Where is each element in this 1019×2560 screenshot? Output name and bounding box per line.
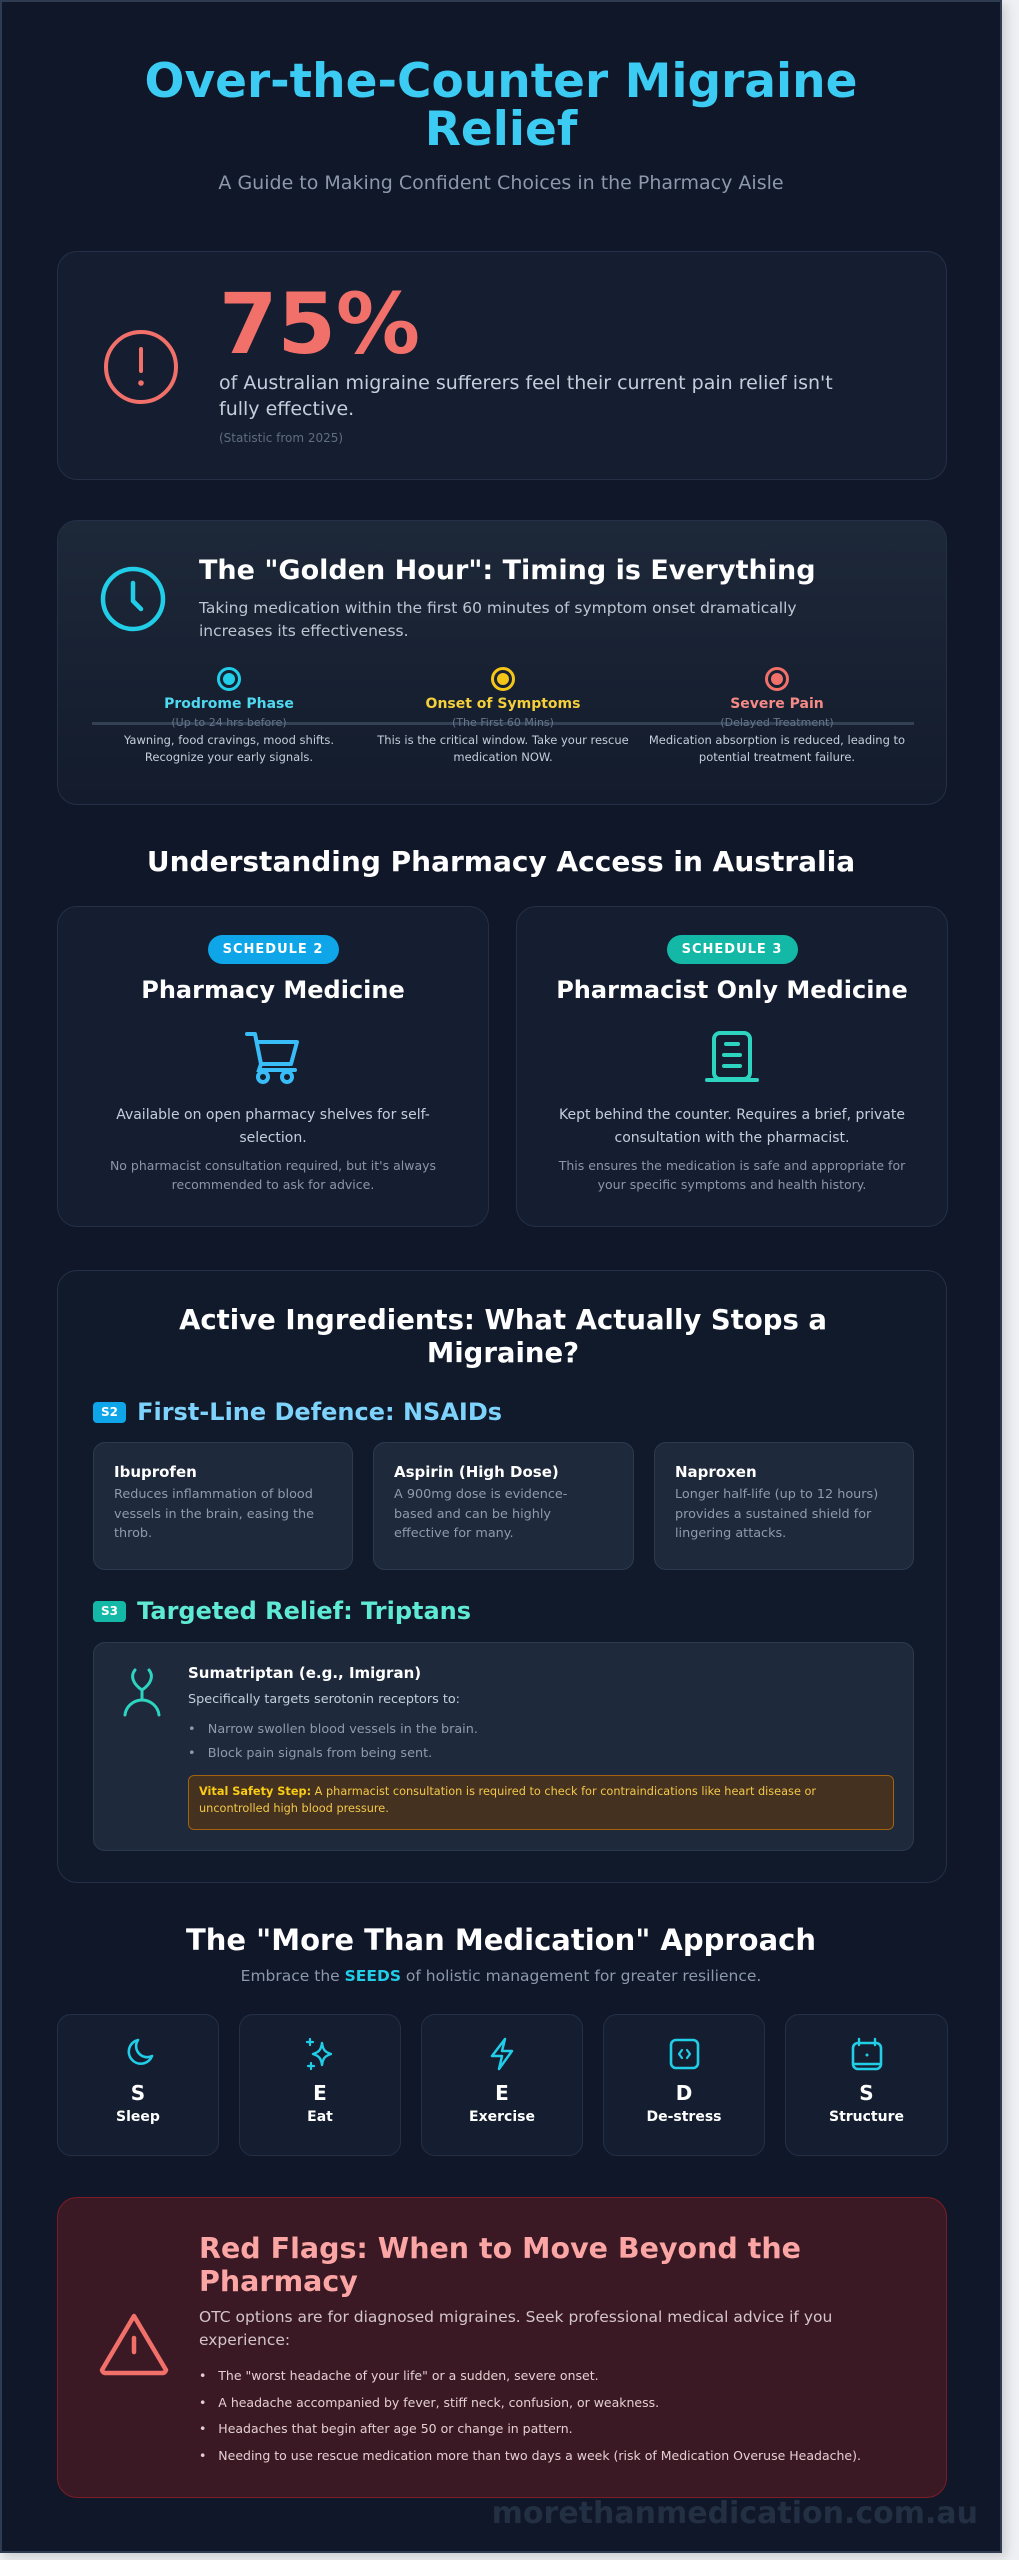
badge: SCHEDULE 3 xyxy=(682,942,782,957)
heading: more than medication: The "More Than Medication" Approach xyxy=(186,1923,816,1957)
heading: Red Flags: When to Move Beyond the xyxy=(199,2232,801,2265)
step: severe: Medication absorption is reduced, leading to xyxy=(649,733,905,747)
description: experience: xyxy=(199,2331,290,2349)
step: onset xyxy=(377,667,629,764)
description: OTC options are for diagnosed migraines. Seek professional medical advice if you xyxy=(199,2308,832,2326)
panel: schedule 2 xyxy=(57,906,489,1227)
bullet list: • A headache accompanied by fever, stiff neck, confusion, or weakness. xyxy=(199,2395,659,2410)
icon: cart xyxy=(245,1032,299,1084)
intro: Specifically targets serotonin receptors to: xyxy=(188,1692,460,1707)
description xyxy=(116,1107,430,1146)
title: Sumatriptan (e.g., Imigran) xyxy=(188,1664,421,1682)
description: Kept behind the counter. Requires a brief, private xyxy=(559,1107,905,1123)
bullet list: • Block pain signals from being sent. xyxy=(188,1746,432,1761)
panel: schedule 3 xyxy=(516,906,948,1227)
step: severe: Severe Pain xyxy=(730,696,824,712)
card: structure: S xyxy=(859,2081,874,2105)
step: severe xyxy=(649,667,905,764)
card title: Pharmacy Medicine xyxy=(141,976,405,1004)
card: naproxen: provides a sustained shield for xyxy=(675,1506,871,1522)
card: de-stress: De-stress xyxy=(646,2109,722,2125)
title: Relief xyxy=(425,102,577,157)
heading: Pharmacy xyxy=(199,2265,358,2298)
step: prodrome: Prodrome Phase xyxy=(164,696,294,712)
watermark: morethanmedication.com.au xyxy=(492,2496,978,2531)
step: prodrome xyxy=(124,667,334,764)
card title: Pharmacist Only Medicine xyxy=(556,976,908,1004)
card: sleep: S xyxy=(131,2081,145,2105)
bullet list: • Narrow swollen blood vessels in the brain. xyxy=(188,1722,478,1737)
card: aspirin: A 900mg dose is evidence- xyxy=(394,1487,567,1502)
description xyxy=(199,2308,832,2349)
step: onset: Onset of Symptoms xyxy=(426,696,580,712)
description: increases its effectiveness. xyxy=(199,622,409,640)
seeds cards xyxy=(57,2014,948,2156)
card: de-stress xyxy=(603,2014,765,2156)
step: severe: (Delayed Treatment) xyxy=(720,716,834,729)
note xyxy=(110,1158,436,1192)
description xyxy=(559,1107,905,1146)
panel: red flags xyxy=(57,2197,947,2498)
card: aspirin: Aspirin (High Dose) xyxy=(394,1463,559,1481)
note xyxy=(558,1158,906,1192)
card: naproxen: lingering attacks. xyxy=(675,1526,786,1541)
bullet list: • Needing to use rescue medication more than two days a week (risk of Medication Overuse Headache). xyxy=(199,2448,861,2463)
subheading: triptans: S3 xyxy=(101,1604,118,1618)
description: Available on open pharmacy shelves for self- xyxy=(116,1107,430,1123)
card: ibuprofen: vessels in the brain, easing the xyxy=(114,1506,314,1522)
heading: Active Ingredients: What Actually Stops a xyxy=(179,1304,827,1336)
icon: counter document xyxy=(705,1031,759,1082)
card: sleep: Sleep xyxy=(116,2109,160,2125)
card: aspirin xyxy=(373,1442,634,1570)
icon: receptor xyxy=(124,1668,160,1716)
card: sumatriptan xyxy=(93,1642,914,1851)
callout: safety: Vital Safety Step: A pharmacist consultation is required to check for contraindications like heart disease or uncontrolled high blood pressure. xyxy=(199,1785,816,1814)
heading xyxy=(179,1304,827,1369)
panel: active ingredients xyxy=(57,1270,947,1883)
card: structure xyxy=(785,2014,948,2156)
description xyxy=(198,599,797,640)
card: ibuprofen: throb. xyxy=(114,1526,152,1541)
note: recommended to ask for advice. xyxy=(172,1177,374,1192)
heading xyxy=(199,2232,801,2298)
note: your specific symptoms and health history. xyxy=(598,1177,866,1192)
subheading: NSAIDs: First-Line Defence: NSAIDs xyxy=(137,1398,502,1426)
description: Taking medication within the first 60 minutes of symptom onset dramatically xyxy=(199,599,797,617)
step: onset: This is the critical window. Take your rescue xyxy=(377,733,629,747)
bullet list: • The "worst headache of your life" or a sudden, severe onset. xyxy=(199,2368,599,2383)
icon: alert circle xyxy=(104,330,178,404)
description: consultation with the pharmacist. xyxy=(614,1130,850,1146)
note: This ensures the medication is safe and appropriate for xyxy=(559,1158,905,1173)
card: exercise: E xyxy=(495,2081,509,2105)
badge: SCHEDULE 2 xyxy=(223,942,323,957)
panel: golden hour xyxy=(57,520,947,805)
card: aspirin: effective for many. xyxy=(394,1526,514,1541)
step: prodrome: Yawning, food cravings, mood shifts. xyxy=(124,733,334,747)
heading: The "Golden Hour": Timing is Everything xyxy=(199,555,816,586)
source note: (Statistic from 2025) xyxy=(219,431,343,445)
card: structure: Structure xyxy=(829,2109,904,2125)
step: prodrome: (Up to 24 hrs before) xyxy=(171,716,287,729)
icon: warning triangle xyxy=(100,2314,168,2376)
bullet list xyxy=(188,1722,478,1761)
card: ibuprofen xyxy=(93,1442,353,1570)
timeline xyxy=(92,667,914,764)
card: ibuprofen: Ibuprofen xyxy=(114,1463,197,1481)
card: exercise: Exercise xyxy=(469,2109,535,2125)
badge xyxy=(208,935,338,964)
heading: Migraine? xyxy=(427,1337,579,1369)
bullet list: • Headaches that begin after age 50 or change in pattern. xyxy=(199,2421,573,2436)
description: selection. xyxy=(239,1130,307,1146)
heading: pharmacy access: Understanding Pharmacy Access in Australia xyxy=(147,845,855,878)
card: eat: Eat xyxy=(307,2109,333,2125)
stat text: fully effective. xyxy=(219,398,354,420)
subheading: NSAIDs: S2 xyxy=(101,1404,118,1418)
icon: clock xyxy=(100,566,166,632)
card: sleep xyxy=(57,2014,219,2156)
subtitle: seeds: Embrace the SEEDS of holistic management for greater resilience. xyxy=(241,1967,761,1985)
card: exercise xyxy=(421,2014,583,2156)
note: No pharmacist consultation required, but it's always xyxy=(110,1158,436,1173)
card: naproxen xyxy=(654,1442,914,1570)
step: onset: medication NOW. xyxy=(453,750,553,764)
title: Over-the-Counter Migraine xyxy=(145,54,857,109)
bullet list xyxy=(199,2368,861,2463)
panel: statistic xyxy=(57,251,947,480)
subtitle: A Guide to Making Confident Choices in the Pharmacy Aisle xyxy=(218,172,784,194)
badge xyxy=(666,935,798,964)
callout: safety xyxy=(188,1775,894,1830)
card: eat xyxy=(239,2014,401,2156)
subheading: triptans: Targeted Relief: Triptans xyxy=(137,1597,471,1625)
card: ibuprofen: Reduces inflammation of blood xyxy=(114,1487,313,1502)
card: de-stress: D xyxy=(676,2081,692,2105)
step: onset: (The First 60 Mins) xyxy=(452,716,554,729)
step: severe: potential treatment failure. xyxy=(699,750,855,764)
card: naproxen: Longer half-life (up to 12 hours) xyxy=(675,1487,878,1502)
card: aspirin: based and can be highly xyxy=(394,1506,551,1522)
card: eat: E xyxy=(313,2081,327,2105)
stat number: 75% xyxy=(219,275,420,373)
stat text: of Australian migraine sufferers feel their current pain relief isn't xyxy=(219,372,833,394)
card: naproxen: Naproxen xyxy=(675,1463,757,1481)
stat text xyxy=(219,372,833,420)
step: prodrome: Recognize your early signals. xyxy=(145,750,313,764)
title xyxy=(145,54,857,157)
